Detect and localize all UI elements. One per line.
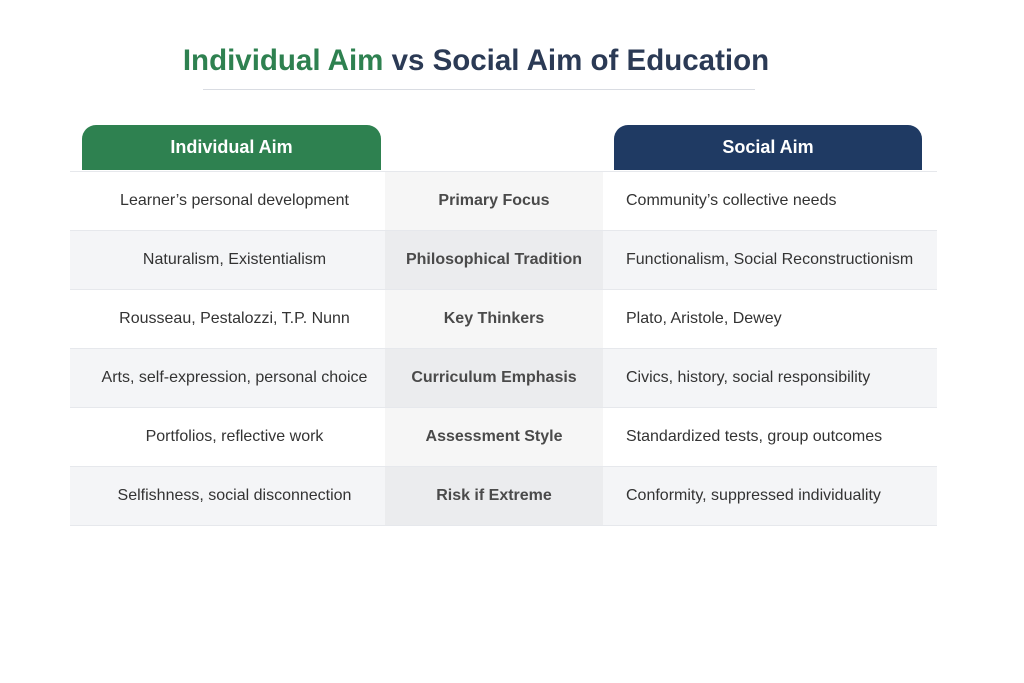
comparison table: Conformity, suppressed individuality: [626, 487, 881, 504]
comparison table: Portfolios, reflective work: [146, 428, 323, 445]
comparison table: Philosophical Tradition: [406, 251, 582, 268]
header: social aim: Social Aim: [722, 137, 814, 157]
comparison table: Community’s collective needs: [626, 192, 836, 209]
comparison table: Functionalism, Social Reconstructionism: [626, 251, 913, 268]
header: individual aim: [82, 125, 381, 170]
comparison table: [70, 171, 937, 526]
title: Individual Aim vs Social Aim of Education: [183, 44, 769, 77]
comparison table: Rousseau, Pestalozzi, T.P. Nunn: [119, 310, 350, 327]
header: social aim: [614, 125, 922, 170]
comparison table: Naturalism, Existentialism: [143, 251, 326, 268]
comparison table: Assessment Style: [426, 428, 562, 445]
comparison table: Curriculum Emphasis: [411, 369, 577, 386]
comparison table: Learner’s personal development: [120, 192, 349, 209]
comparison table: Plato, Aristole, Dewey: [626, 310, 782, 327]
comparison table: Risk if Extreme: [436, 487, 552, 504]
comparison table: Civics, history, social responsibility: [626, 369, 870, 386]
comparison table: Standardized tests, group outcomes: [626, 428, 882, 445]
header: individual aim: Individual Aim: [170, 137, 293, 157]
comparison table: Primary Focus: [438, 192, 550, 209]
comparison table: Selfishness, social disconnection: [118, 487, 351, 504]
comparison table: Key Thinkers: [444, 310, 544, 327]
comparison table: Arts, self-expression, personal choice: [102, 369, 367, 386]
